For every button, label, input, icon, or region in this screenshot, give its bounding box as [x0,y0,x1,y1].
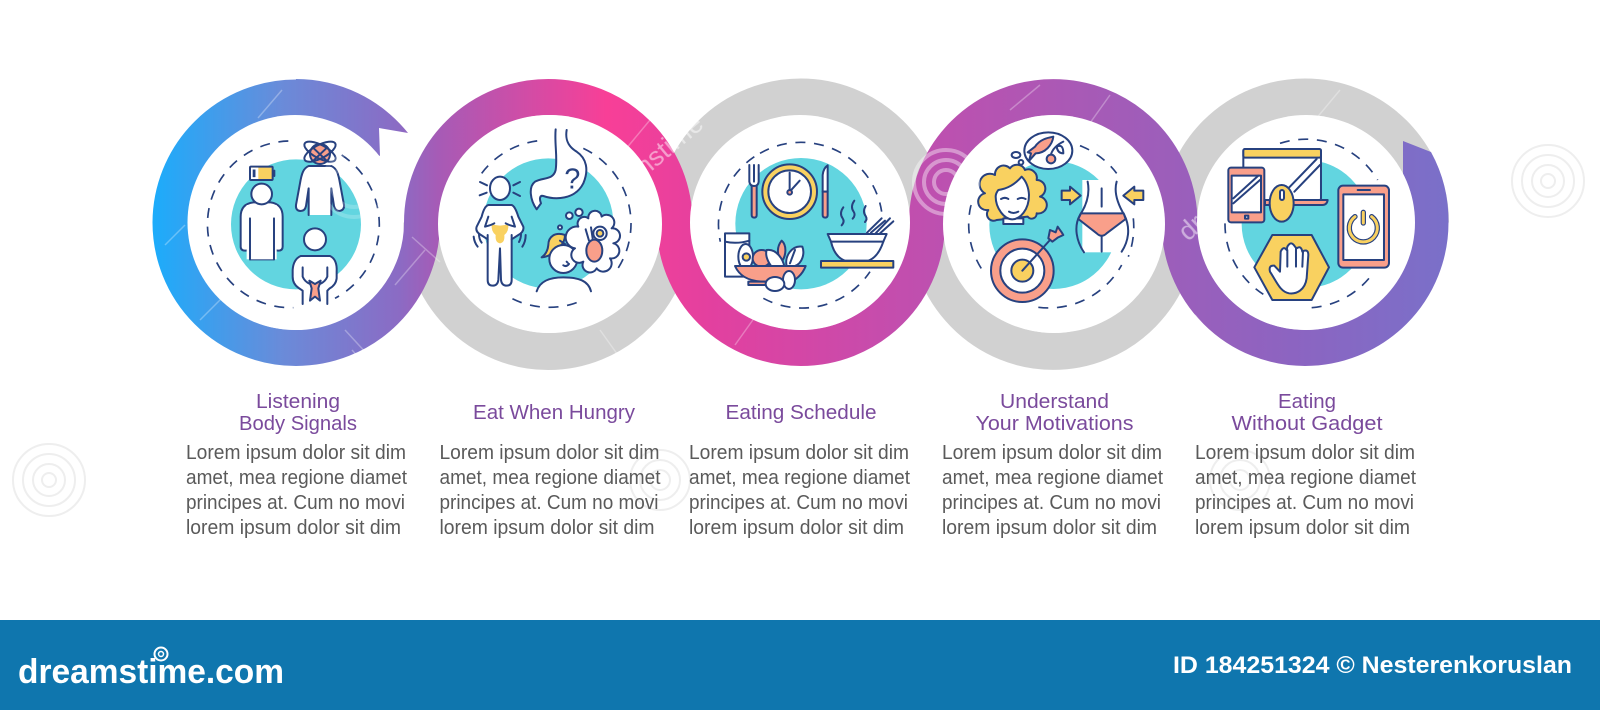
white inner circles [188,115,1415,333]
soup bowl [821,218,893,268]
colored wave ribbon with arrow [170,79,1449,348]
text: eat when hungry: Lorem ipsum dolor sit dim [440,442,660,464]
ring watermarks [165,85,1340,368]
ring text watermarks [612,108,1297,246]
background watermarks [13,145,1584,516]
text: listening body signals [186,391,407,539]
phone with power [1338,186,1389,268]
mouse [1270,185,1294,222]
ribbon tail [1403,141,1449,222]
text: eating without gadget: principes at. Cum no movi [1195,492,1414,514]
text: understand your motivations [942,391,1163,539]
text: eat when hungry: lorem ipsum dolor sit dim [440,517,654,539]
salad [725,233,806,291]
target [991,227,1063,302]
ring text watermarks: dreamstime [1172,130,1297,246]
text: listening body signals: Body Signals [239,413,357,435]
arrows [1062,187,1143,204]
text: eat when hungry: Eat When Hungry [473,402,635,424]
footer logo: dreamstime.com [18,653,284,691]
woman thinking about food [537,209,620,291]
text: eating without gadget: amet, mea regione diamet [1195,467,1416,489]
text: understand your motivations: lorem ipsum dolor sit dim [942,517,1157,539]
text: listening body signals: lorem ipsum dolor sit dim [186,517,401,539]
text: listening body signals: amet, mea regione diamet [186,467,407,489]
icon: body signals [207,138,379,308]
text: eating without gadget: Without Gadget [1232,413,1383,435]
tablet [1228,168,1264,222]
clock plate [762,164,817,219]
text: eating without gadget: Lorem ipsum dolor sit dim [1195,442,1415,464]
footer credit: ID 184251324 © Nesterenkoruslan [1173,652,1572,679]
thought bubble with fish [1012,132,1072,169]
text: eat when hungry: amet, mea regione diamet [440,467,661,489]
text: eating schedule: lorem ipsum dolor sit dim [689,517,904,539]
stop hand [1254,235,1329,300]
arrow head [296,79,408,156]
gray wave ring segments [422,97,1430,352]
text: eating without gadget: lorem ipsum dolor sit dim [1195,517,1410,539]
text: eating schedule [689,402,910,539]
text: understand your motivations: principes at. Cum no movi [942,492,1161,514]
stomach [531,129,586,209]
text: understand your motivations: Understand [1000,391,1109,413]
ring text watermarks: amstime [612,108,709,197]
text: listening body signals: Listening [256,391,340,413]
fork [749,165,759,218]
curly haired woman [978,165,1047,224]
text: eating without gadget: Eating [1278,391,1336,413]
footer band [0,620,1600,710]
text: understand your motivations: amet, mea regione diamet [942,467,1163,489]
text: listening body signals: Lorem ipsum dolor sit dim [186,442,406,464]
stomach: ? [564,163,580,195]
text: eat when hungry [440,402,661,539]
text: eating schedule: Lorem ipsum dolor sit dim [689,442,909,464]
text: listening body signals: principes at. Cum no movi [186,492,405,514]
hungry person [474,177,526,286]
text: understand your motivations: Lorem ipsum dolor sit dim [942,442,1162,464]
icon: eating schedule [718,142,893,308]
text: eating schedule: principes at. Cum no movi [689,492,908,514]
text: eating schedule: Eating Schedule [726,402,876,424]
icon: understand motivations [969,132,1143,308]
knife [823,165,828,218]
steam [841,201,867,225]
laptop [1243,149,1328,205]
person with cramp [293,228,337,304]
text: eating schedule: amet, mea regione diamet [689,467,910,489]
waist [1076,180,1128,252]
icon: hunger [474,129,631,307]
text: eating without gadget [1195,391,1416,539]
text: eat when hungry: principes at. Cum no movi [440,492,658,514]
icon: without gadgets [1225,139,1389,308]
ring spiral watermarks [322,150,978,217]
person with low battery [241,167,283,259]
person with crossed head [296,138,344,215]
text: understand your motivations: Your Motivations [976,413,1134,435]
